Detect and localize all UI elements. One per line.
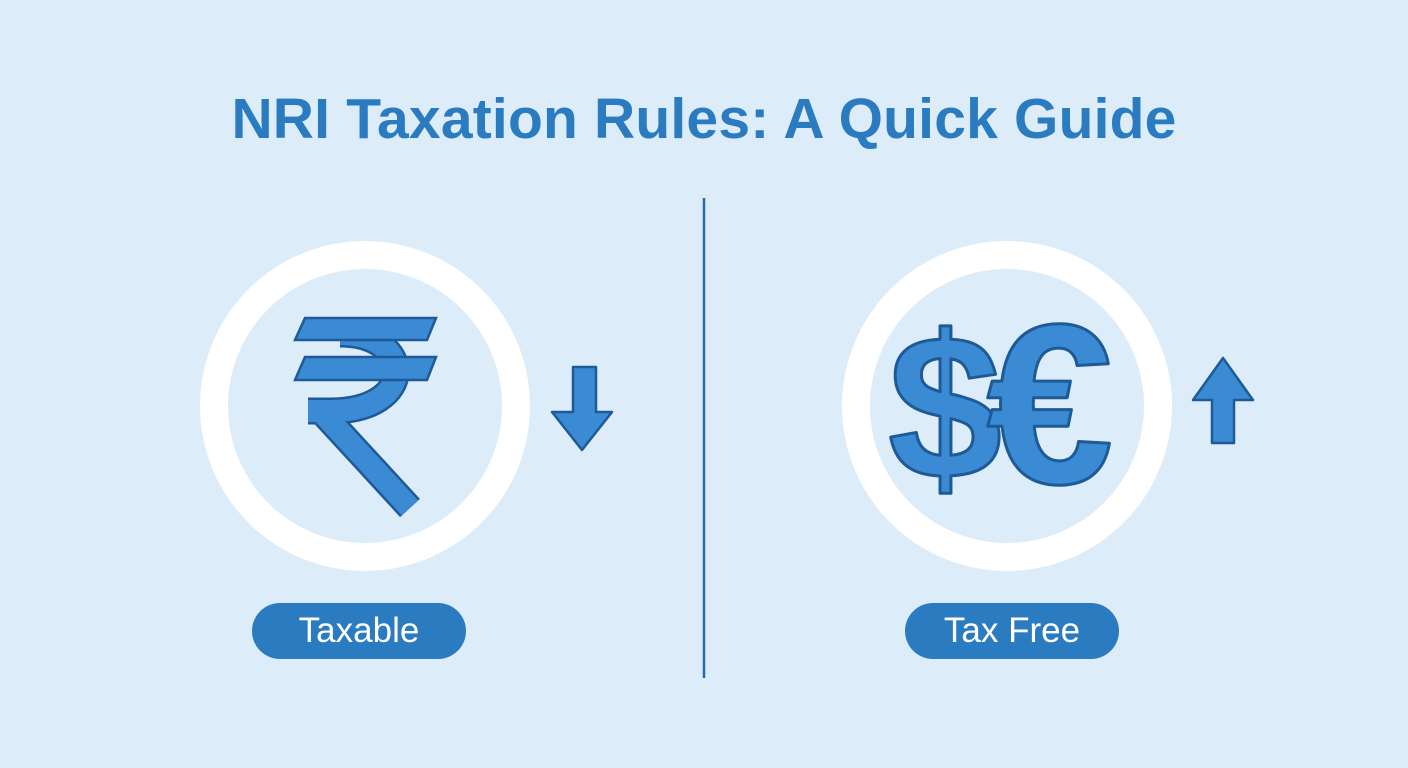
- divider: [703, 198, 705, 678]
- icon: rupee: [295, 318, 436, 508]
- icon: dollar and euro: $: [888, 293, 1002, 522]
- icon: up arrow: [1193, 358, 1253, 443]
- icon: dollar and euro: €: [987, 278, 1113, 532]
- title: NRI Taxation Rules: A Quick Guide: [231, 87, 1177, 151]
- icon: dollar and euro: [888, 278, 1113, 532]
- icon: rupee circle: [214, 255, 516, 557]
- label: tax free: [905, 603, 1119, 659]
- label: tax free: Tax Free: [944, 611, 1080, 650]
- label: taxable: [252, 603, 466, 659]
- icon: dollar euro circle: [856, 255, 1158, 557]
- label: taxable: Taxable: [299, 611, 419, 650]
- icon: down arrow: [552, 367, 612, 450]
